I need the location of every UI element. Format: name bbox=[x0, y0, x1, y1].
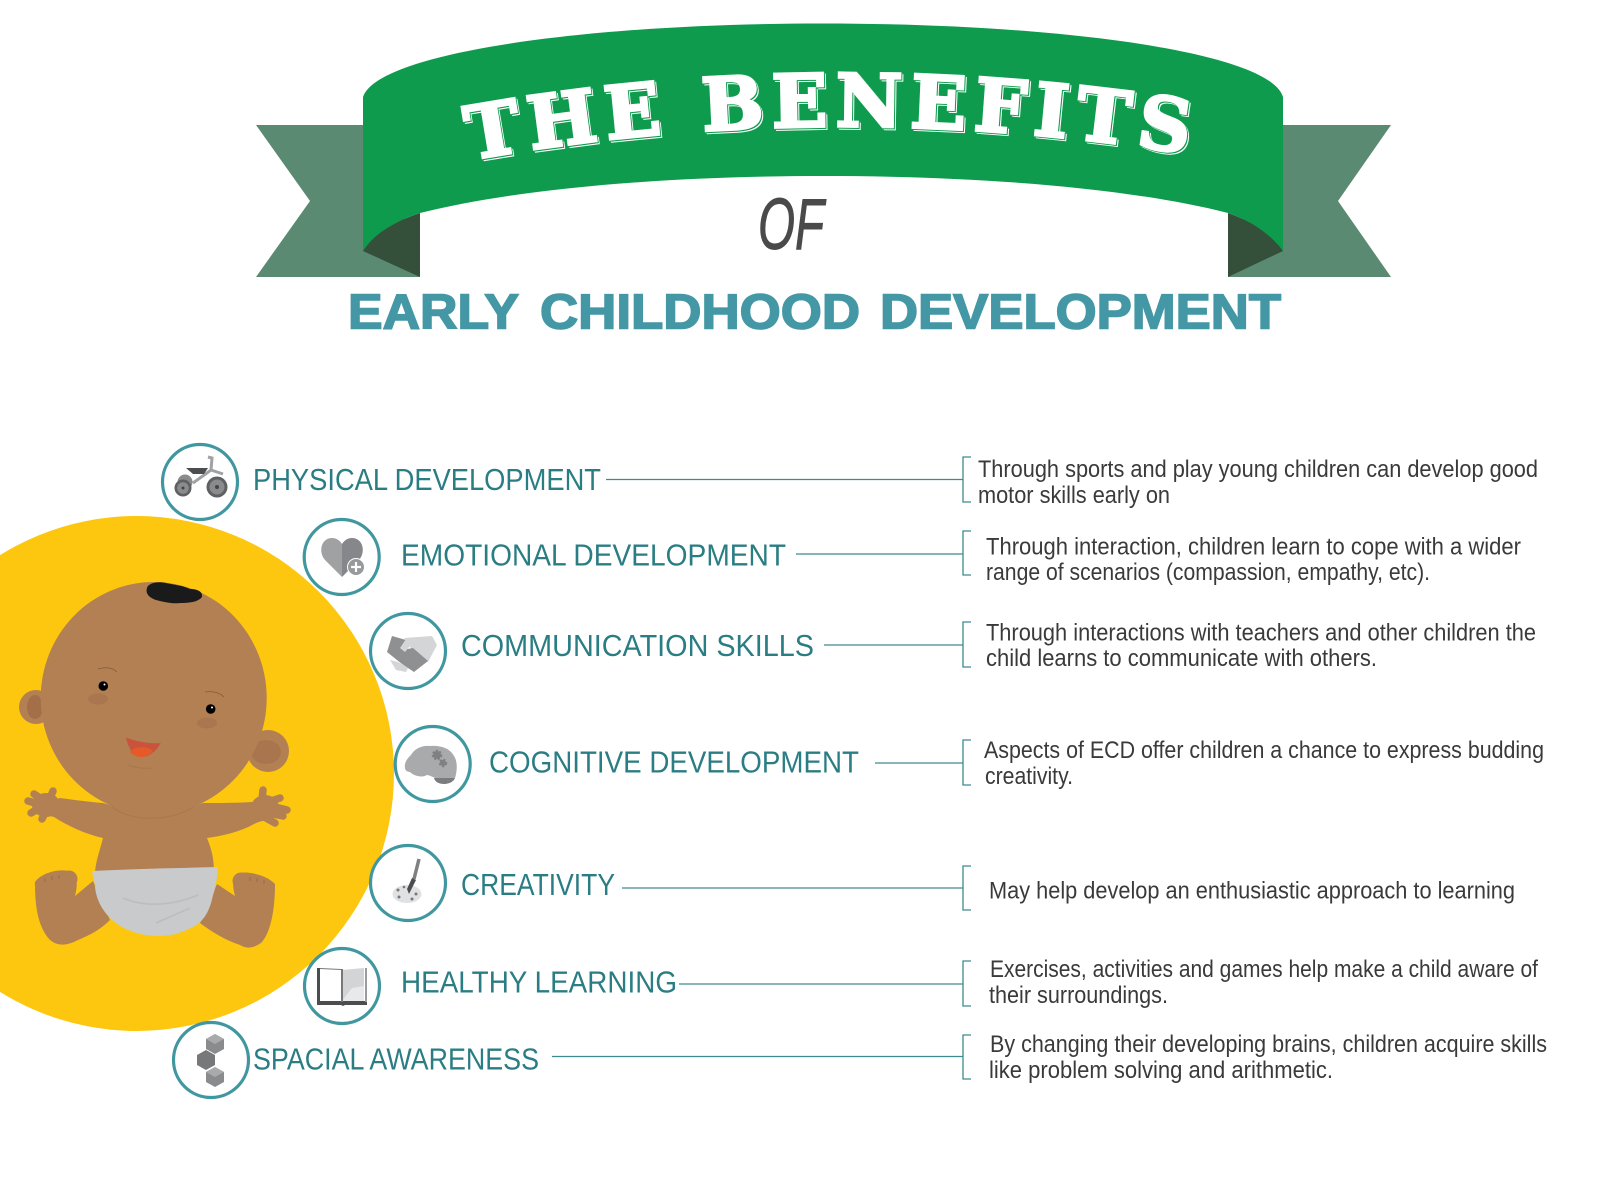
ribbon main band bbox=[363, 24, 1283, 251]
row: physical development bbox=[162, 444, 1538, 520]
row: healthy learning bbox=[304, 948, 1538, 1024]
row: communication skills bbox=[370, 614, 1536, 688]
description: range of scenarios (compassion, empathy, etc). bbox=[986, 559, 1430, 586]
title: early childhood development: CHILDHOOD bbox=[540, 286, 860, 340]
row: cognitive development bbox=[395, 726, 1544, 802]
description: May help develop an enthusiastic approach to learning bbox=[989, 878, 1515, 904]
icon: brain bbox=[395, 726, 470, 802]
baby left ear bbox=[19, 690, 53, 724]
description: creativity. bbox=[985, 763, 1073, 790]
description: motor skills early on bbox=[978, 482, 1170, 509]
label: CREATIVITY bbox=[461, 867, 615, 902]
connector and bracket bbox=[552, 1035, 971, 1079]
icon: heart bbox=[304, 520, 379, 594]
label: EMOTIONAL DEVELOPMENT bbox=[401, 538, 786, 572]
baby head bbox=[41, 582, 267, 814]
diaper folds bbox=[123, 895, 198, 923]
label: COGNITIVE DEVELOPMENT bbox=[489, 744, 859, 780]
row: spacial awareness bbox=[174, 1022, 1547, 1098]
description: their surroundings. bbox=[989, 982, 1168, 1009]
connector and bracket bbox=[824, 622, 971, 667]
baby mouth bbox=[126, 738, 161, 757]
label: HEALTHY LEARNING bbox=[401, 964, 677, 1000]
label: COMMUNICATION SKILLS bbox=[461, 628, 814, 663]
baby left leg bbox=[35, 870, 110, 945]
ribbon right tail bbox=[1228, 125, 1391, 277]
icon: palette and brush bbox=[370, 846, 446, 920]
title: of: OF bbox=[758, 185, 827, 265]
baby chin and neck lines bbox=[112, 765, 193, 818]
connector and bracket bbox=[679, 961, 971, 1006]
row: creativity bbox=[370, 846, 1515, 920]
baby cheeks bbox=[88, 694, 217, 728]
baby torso bbox=[95, 810, 214, 872]
description: Aspects of ECD offer children a chance to express budding bbox=[984, 737, 1544, 764]
connector and bracket bbox=[622, 866, 971, 910]
connector and bracket bbox=[606, 457, 971, 502]
baby left arm bbox=[28, 791, 130, 838]
label: PHYSICAL DEVELOPMENT bbox=[253, 462, 601, 497]
baby eyebrows bbox=[98, 668, 224, 697]
ribbon left fold bbox=[363, 213, 420, 277]
title: early childhood development: EARLY bbox=[348, 286, 519, 340]
description: Through interactions with teachers and other children the bbox=[986, 620, 1536, 646]
ribbon left tail bbox=[256, 125, 420, 277]
icon: handshake bbox=[370, 614, 446, 688]
baby illustration bbox=[19, 582, 289, 948]
icon: open book bbox=[304, 948, 380, 1024]
baby hair bbox=[147, 582, 202, 603]
title: early childhood development: DEVELOPMENT bbox=[880, 286, 1281, 340]
title: the benefits: THE BENEFITS bbox=[460, 71, 1191, 162]
connector and bracket bbox=[875, 740, 971, 785]
description: Through sports and play young children can develop good bbox=[978, 456, 1538, 483]
baby right leg bbox=[200, 872, 275, 948]
icon: hexagon cubes bbox=[174, 1022, 248, 1098]
description: like problem solving and arithmetic. bbox=[989, 1057, 1333, 1084]
label: SPACIAL AWARENESS bbox=[253, 1042, 539, 1076]
description: By changing their developing brains, children acquire skills bbox=[990, 1031, 1547, 1058]
description: child learns to communicate with others. bbox=[986, 645, 1377, 672]
description: Through interaction, children learn to cope with a wider bbox=[986, 534, 1521, 560]
description: Exercises, activities and games help make a child aware of bbox=[990, 956, 1538, 983]
baby eyes bbox=[98, 681, 216, 714]
connector and bracket bbox=[796, 531, 971, 575]
baby right ear bbox=[247, 730, 289, 772]
baby right arm bbox=[180, 790, 287, 838]
ribbon banner bbox=[256, 24, 1391, 277]
row: emotional development bbox=[304, 520, 1521, 594]
yellow circle bbox=[0, 516, 394, 1031]
baby toes bbox=[45, 875, 264, 884]
baby diaper bbox=[92, 867, 218, 936]
icon: tricycle bbox=[162, 444, 238, 520]
ribbon right fold bbox=[1228, 213, 1283, 277]
